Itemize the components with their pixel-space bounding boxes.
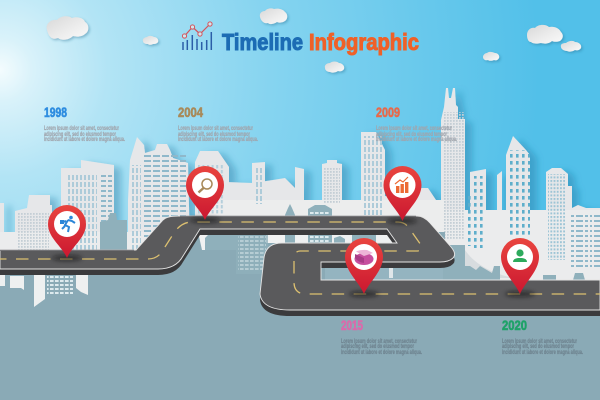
road top edge shading (0, 216, 416, 250)
text block: 2020 (502, 318, 583, 356)
soft shade on paper base (465, 250, 515, 278)
text block: 2015: incididunt ut labore et dolore magna aliqua. (341, 350, 422, 356)
text block: 2004 (178, 105, 258, 143)
building windows (18, 212, 49, 250)
road surface (0, 216, 600, 310)
clouds (47, 8, 581, 73)
icon: pie chart (354, 250, 374, 265)
text block: 2004: adipiscing elit, sed do eiusmod tempor (178, 132, 250, 138)
title: Timeline (222, 29, 303, 55)
text block: 2020: 2020 (502, 318, 527, 333)
paper base blocks (440, 210, 600, 280)
text block: 2009: incididunt ut labore et dolore magna aliqua. (376, 137, 457, 143)
title: Infographic (309, 29, 419, 55)
text block: 1998: incididunt ut labore et dolore magna aliqua. (44, 137, 125, 143)
text block: 1998 (44, 105, 125, 143)
text block: 2004: 2004 (178, 105, 203, 120)
text block: 2015: Lorem ipsum dolor sit amet, consectetur (341, 339, 417, 345)
title (222, 29, 419, 55)
road centre dashes (0, 222, 600, 294)
reflected building fragments (0, 228, 445, 307)
text block: 2009: 2009 (376, 105, 400, 120)
text block: 2015: 2015 (341, 318, 363, 333)
icon: chart with line and bars (182, 22, 212, 50)
text block: 2015: adipiscing elit, sed do eiusmod tempor (341, 344, 414, 350)
pin: 2009 (384, 166, 422, 224)
pin: 2004 (186, 166, 224, 223)
text block: 1998: 1998 (44, 105, 67, 120)
icon: magnifier (198, 179, 212, 192)
text block: 2004: incididunt ut labore et dolore magna aliqua. (178, 137, 258, 143)
text block: 2009: adipiscing elit, sed do eiusmod tempor (376, 132, 447, 138)
city skyline (0, 88, 600, 280)
pin: 1998 (48, 205, 86, 261)
text block: 2004: Lorem ipsum dolor sit amet, consectetur (178, 126, 253, 132)
icon: person (513, 249, 527, 262)
icon: growth chart (395, 177, 408, 193)
icon: runner (60, 216, 75, 232)
pin: 2015 (345, 238, 383, 297)
pin: 2020 (501, 238, 539, 297)
text block: 2015 (341, 318, 422, 356)
text block: 2009: Lorem ipsum dolor sit amet, consectetur (376, 126, 452, 132)
teal silhouettes in front of the city (100, 204, 585, 280)
text block: 2009 (376, 105, 457, 143)
text block: 1998: adipiscing elit, sed do eiusmod tempor (44, 132, 116, 138)
text block: 1998: Lorem ipsum dolor sit amet, consectetur (44, 126, 119, 132)
road (0, 216, 600, 316)
ground (0, 232, 600, 400)
road side wall (0, 222, 600, 316)
